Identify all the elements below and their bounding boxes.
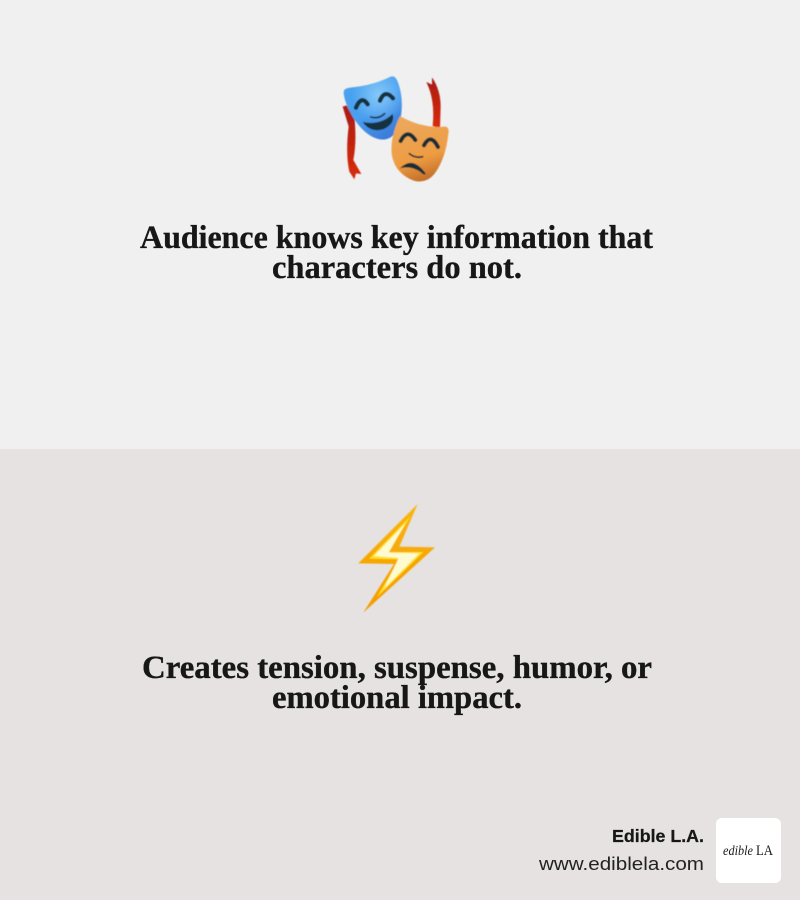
footer: brand name: Edible L.A. <box>612 826 704 846</box>
footer: website: www.ediblela.com <box>538 853 704 874</box>
right red ribbon <box>426 77 441 128</box>
heading: top statement: Audience knows key information that <box>140 220 653 256</box>
heading: top statement <box>140 220 653 286</box>
heading: bottom statement: Creates tension, suspense, humor, or <box>142 650 652 686</box>
icon: lightning bolt <box>358 504 435 613</box>
icon: theatre masks <box>343 76 449 181</box>
blue mask <box>344 76 402 140</box>
logo: Edible LA <box>716 818 781 883</box>
heading: bottom statement: emotional impact. <box>272 680 522 716</box>
panel: bottom section background <box>0 449 800 900</box>
logo: Edible LA: LA <box>756 843 773 859</box>
orange mask <box>392 116 449 181</box>
heading: top statement: characters do not. <box>272 250 522 286</box>
logo: Edible LA: edible <box>723 844 753 859</box>
panel: top section background <box>0 0 800 449</box>
heading: bottom statement <box>142 650 652 716</box>
left red ribbon <box>343 105 361 179</box>
